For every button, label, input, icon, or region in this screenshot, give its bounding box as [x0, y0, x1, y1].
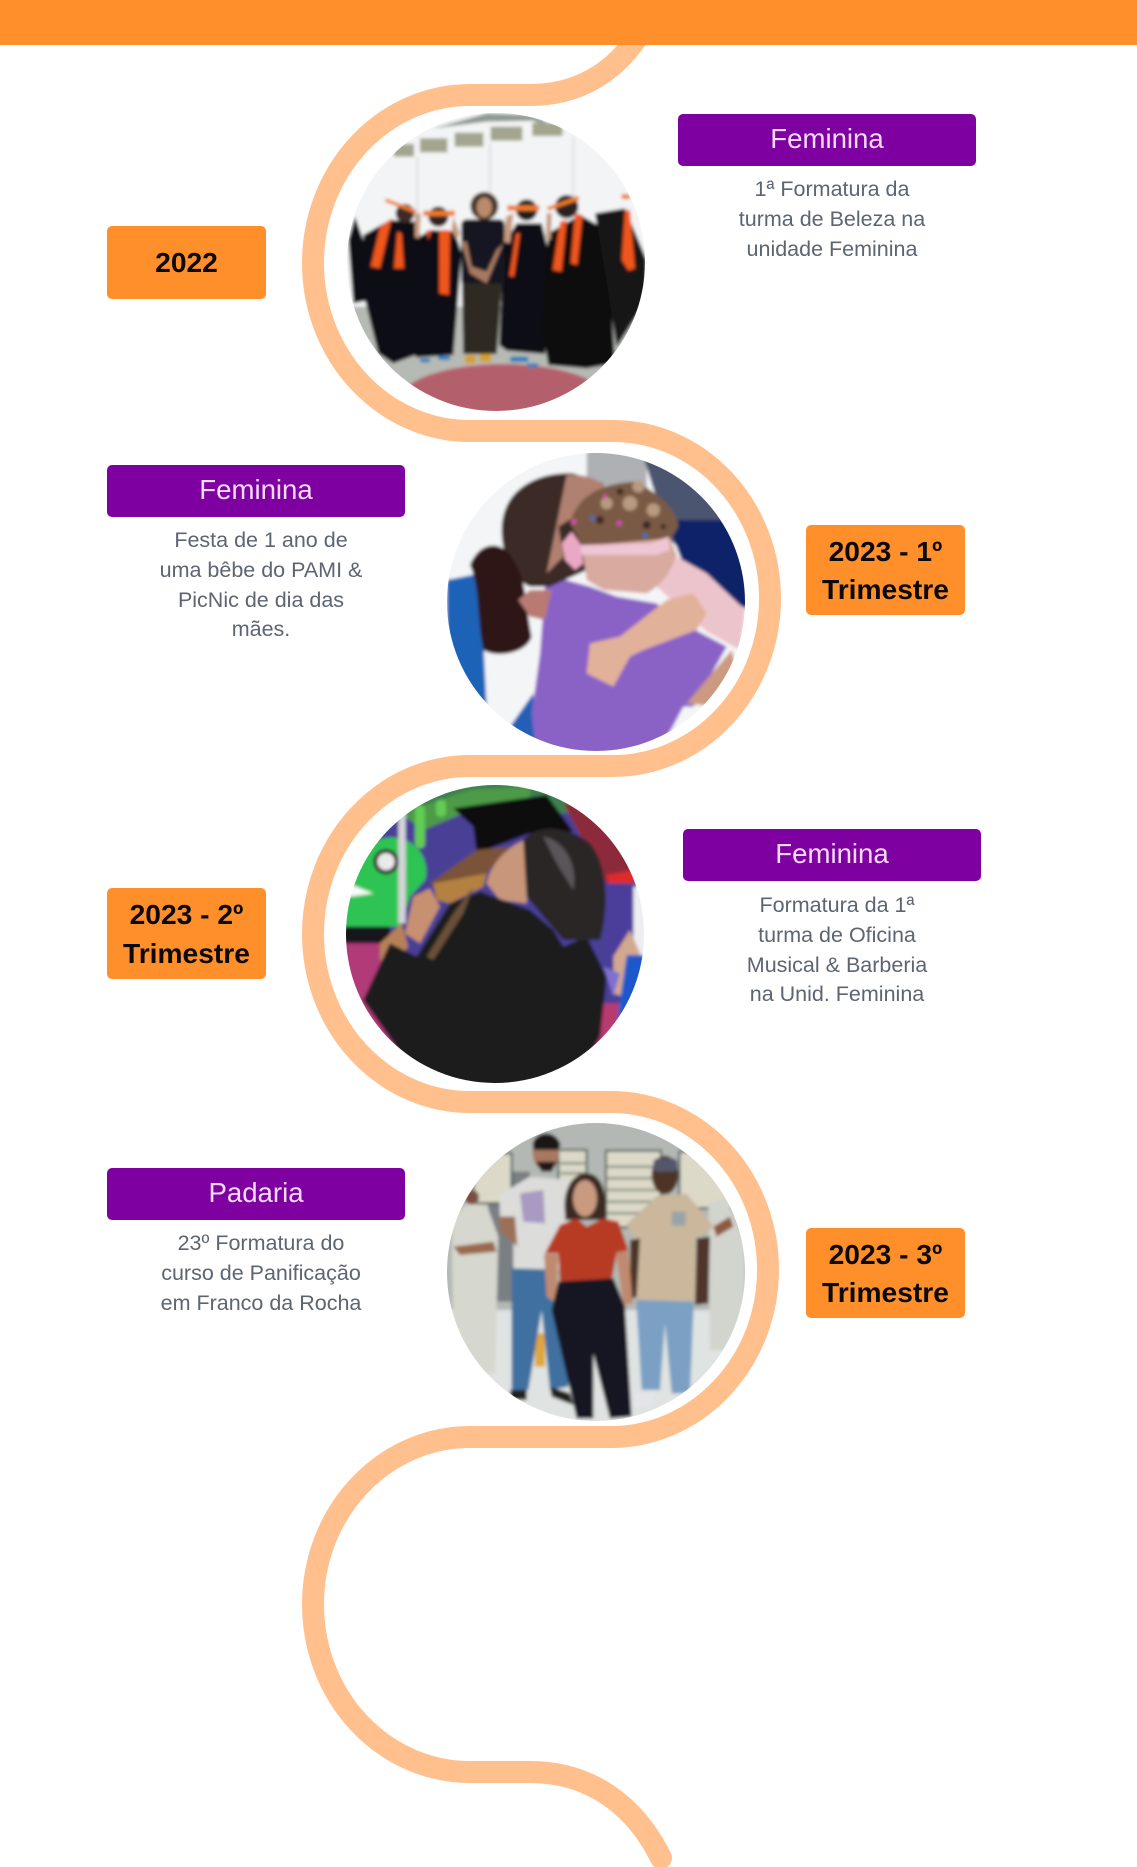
- category label: Feminina (1): Feminina: [770, 123, 884, 154]
- description: baby's first birthday: [160, 528, 362, 641]
- serpentine timeline ribbon: [313, 30, 770, 1858]
- year badge: 2023 third quarter: 2023 - 3º: [829, 1238, 942, 1270]
- year badge: 2022: 2022: [155, 246, 218, 278]
- category label: Feminina (2): Feminina: [199, 474, 313, 505]
- description: music and barber class graduation: Musical & Barberia: [747, 953, 927, 977]
- photo: woman hugging baby: [440, 447, 753, 760]
- category label: Feminina (3): [683, 829, 981, 881]
- year badge: 2023 first quarter: Trimestre: [822, 573, 949, 605]
- top orange band: [0, 0, 1137, 45]
- year badge: 2022: [107, 226, 266, 299]
- category label: Feminina (3): Feminina: [775, 838, 889, 869]
- description: baby's first birthday: Festa de 1 ano de: [174, 528, 348, 552]
- year badge: 2023 second quarter: [107, 888, 266, 979]
- description: beauty class graduation: [739, 177, 926, 261]
- description: baby's first birthday: uma bêbe do PAMI &: [160, 558, 362, 582]
- year badge: 2023 second quarter: Trimestre: [123, 936, 250, 968]
- year badge: 2023 third quarter: [806, 1228, 965, 1318]
- description: music and barber class graduation: na Unid. Feminina: [750, 982, 924, 1006]
- year badge: 2023 first quarter: [806, 525, 965, 615]
- description: music and barber class graduation: [747, 893, 928, 1006]
- description: bakery course graduation: em Franco da Rocha: [161, 1291, 361, 1315]
- category label: Feminina (2): [107, 465, 405, 517]
- description: bakery course graduation: curso de Panificação: [161, 1261, 361, 1285]
- year badge: 2023 third quarter: Trimestre: [822, 1276, 949, 1308]
- description: bakery course graduation: [161, 1231, 362, 1315]
- category label: Padaria: Padaria: [208, 1177, 304, 1208]
- category label: Feminina (1): [678, 114, 976, 166]
- photo: bakery course team: [440, 1117, 753, 1430]
- description: beauty class graduation: unidade Feminina: [747, 237, 917, 261]
- description: baby's first birthday: mães.: [232, 617, 290, 641]
- description: music and barber class graduation: Formatura da 1ª: [760, 893, 914, 917]
- photo: embrace at graduation: [340, 777, 653, 1090]
- description: bakery course graduation: 23º Formatura do: [178, 1231, 344, 1255]
- photo: graduates in black gowns: [347, 113, 645, 411]
- year badge: 2023 second quarter: 2023 - 2º: [130, 898, 243, 930]
- category label: Padaria: [107, 1168, 405, 1220]
- year badge: 2023 first quarter: 2023 - 1º: [829, 534, 942, 566]
- description: music and barber class graduation: turma de Oficina: [758, 923, 916, 947]
- description: baby's first birthday: PicNic de dia das: [178, 588, 344, 612]
- description: beauty class graduation: 1ª Formatura da: [755, 177, 909, 201]
- description: beauty class graduation: turma de Beleza na: [739, 207, 925, 231]
